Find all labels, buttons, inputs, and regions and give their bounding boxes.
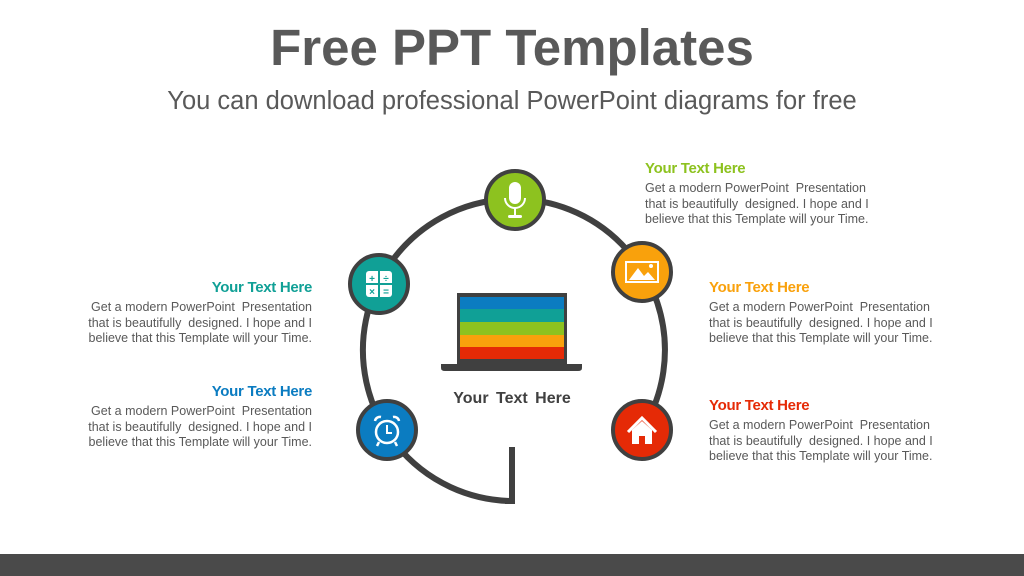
- text block: teal: [88, 279, 312, 345]
- text block: red: Get a modern PowerPoint Presentation: [709, 418, 930, 432]
- text block: teal: that is beautifully designed. I hope and I: [88, 316, 312, 330]
- text block: green: Get a modern PowerPoint Presentation: [645, 181, 866, 195]
- icon: calculator: +: [369, 274, 375, 285]
- text block: blue: Your Text Here: [212, 383, 312, 400]
- text block: red: that is beautifully designed. I hope and I: [709, 434, 933, 448]
- text block: orange: Your Text Here: [709, 279, 809, 296]
- text block: teal: Get a modern PowerPoint Presentation: [91, 300, 312, 314]
- icon: microphone: [486, 171, 544, 229]
- title: Free PPT Templates: [270, 19, 754, 76]
- icon: home: [613, 401, 671, 459]
- text block: orange: that is beautifully designed. I hope and I: [709, 316, 933, 330]
- text block: green: [645, 160, 869, 226]
- footer bar: [0, 554, 1024, 576]
- text block: orange: [709, 279, 933, 345]
- text block: blue: [88, 383, 312, 449]
- icon: calculator: [350, 255, 408, 313]
- text block: red: Your Text Here: [709, 397, 809, 414]
- center label: Your Text Here: [453, 390, 571, 407]
- icon: calculator: =: [383, 287, 389, 298]
- laptop: [441, 293, 582, 371]
- text block: blue: believe that this Template will your Time.: [89, 435, 312, 449]
- text block: teal: believe that this Template will your Time.: [89, 331, 312, 345]
- icon: image: [613, 243, 671, 301]
- text block: orange: believe that this Template will your Time.: [709, 331, 932, 345]
- icon: clock: [358, 401, 416, 459]
- text block: green: believe that this Template will your Time.: [645, 212, 868, 226]
- text block: teal: Your Text Here: [212, 279, 312, 296]
- text block: red: [709, 397, 933, 463]
- text block: red: believe that this Template will your Time.: [709, 449, 932, 463]
- icon: calculator: ÷: [383, 274, 389, 285]
- text block: blue: Get a modern PowerPoint Presentation: [91, 404, 312, 418]
- text block: green: that is beautifully designed. I hope and I: [645, 196, 869, 210]
- ring arc: [363, 199, 665, 501]
- text block: orange: Get a modern PowerPoint Presentation: [709, 300, 930, 314]
- icon: calculator: ×: [369, 287, 375, 298]
- text block: blue: that is beautifully designed. I hope and I: [88, 420, 312, 434]
- text block: green: Your Text Here: [645, 160, 745, 177]
- subtitle: You can download professional PowerPoint diagrams for free: [167, 87, 857, 115]
